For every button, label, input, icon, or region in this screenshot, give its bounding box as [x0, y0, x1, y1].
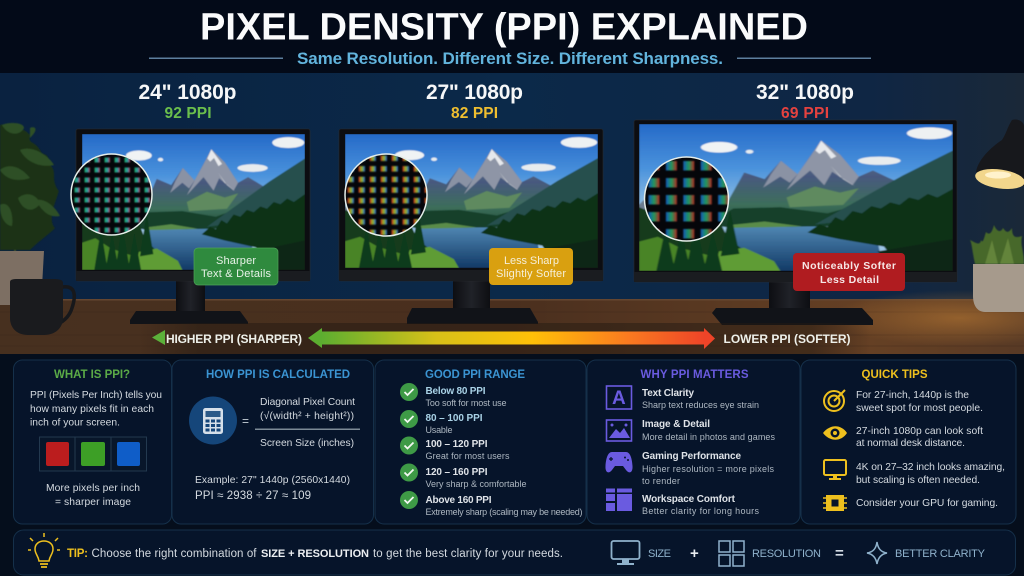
- range: above 160: Extremely sharp (scaling may be needed): [426, 507, 582, 517]
- item: image and detail: [606, 419, 776, 442]
- coffee mug: [10, 279, 74, 335]
- monitor 1: [70, 129, 310, 324]
- range: 80 to 100: [400, 410, 483, 435]
- title: PIXEL DENSITY (PPI) EXPLAINED: [200, 6, 808, 48]
- label: 24 inch monitor: 92 PPI: [164, 105, 212, 122]
- sharpness scale arrow: [140, 323, 870, 354]
- monitor 3: [634, 120, 957, 325]
- description: PPI (Pixels Per Inch) tells you: [30, 390, 162, 401]
- caption: [46, 483, 140, 508]
- description: how many pixels fit in each: [30, 404, 154, 415]
- badge: sharper: [194, 248, 278, 285]
- subtitle: Same Resolution. Different Size. Different Sharpness.: [297, 49, 723, 68]
- equals: =: [835, 545, 844, 562]
- range: above 160: [400, 491, 582, 517]
- panel: why PPI matters: [587, 360, 800, 524]
- stand 1: [130, 280, 248, 324]
- item: text clarity: Sharp text reduces eye strain: [642, 400, 759, 410]
- badge: less sharp: [489, 248, 573, 285]
- equation: resolution: [719, 541, 821, 566]
- desk lamp: [974, 119, 1024, 192]
- item: text clarity: [606, 386, 759, 410]
- heading: QUICK TIPS: [862, 369, 928, 381]
- label: 24 inch monitor: [138, 81, 236, 122]
- tip: 4K scaling: 4K on 27–32 inch looks amazing,: [856, 462, 1005, 473]
- heading: WHAT IS PPI?: [54, 369, 130, 381]
- badge: less sharp: Less Sharp: [504, 255, 559, 267]
- example: PPI ≈ 2938 ÷ 27 ≈ 109: [195, 490, 311, 502]
- label: 27 inch monitor: 82 PPI: [451, 105, 498, 122]
- tip: 4K scaling: but scaling is often needed.: [856, 475, 980, 486]
- lower label: LOWER PPI (SOFTER): [724, 332, 850, 346]
- formula: [242, 397, 360, 449]
- item: workspace comfort: Workspace Comfort: [642, 494, 736, 505]
- item: workspace comfort: [606, 488, 760, 516]
- label: 27 inch monitor: [426, 81, 523, 122]
- range: below 80: Below 80 PPI: [426, 386, 486, 397]
- item: workspace comfort: Better clarity for long hours: [642, 506, 760, 516]
- range: below 80: [400, 383, 506, 408]
- tip text: [67, 548, 563, 560]
- formula: Screen Size (inches): [260, 438, 354, 449]
- tip: 4K scaling: [824, 460, 1005, 486]
- description: [30, 390, 162, 428]
- monitor 2: [339, 129, 603, 324]
- equation: size: [612, 541, 671, 565]
- panel: what is PPI: [14, 360, 172, 524]
- formula: =: [242, 414, 249, 428]
- desk: [0, 290, 1024, 355]
- icon: light bulb: [28, 533, 60, 567]
- icon: calculator: [189, 396, 237, 444]
- tip text: TIP:: [67, 548, 88, 560]
- screen 3 landscape: [639, 124, 953, 271]
- tip: desk distance: 27-inch 1080p can look soft: [856, 426, 983, 437]
- item: gaming performance: Gaming Performance: [642, 451, 741, 462]
- badge: sharper: Sharper: [216, 255, 256, 267]
- gradient bar: [308, 328, 715, 349]
- badge: noticeably softer: [793, 253, 905, 291]
- heading: HOW PPI IS CALCULATED: [206, 369, 350, 381]
- panel: quick tips: [801, 360, 1016, 524]
- item: gaming performance: Higher resolution = more pixels: [642, 464, 774, 474]
- tip: sweet spot: sweet spot for most people.: [856, 403, 983, 414]
- tip text: Choose the right combination of: [92, 548, 257, 560]
- item: text clarity: A: [612, 388, 626, 409]
- bezel 3: [634, 120, 957, 282]
- magnifier 3 pixel grid: [644, 157, 729, 242]
- badge: noticeably softer: Noticeably Softer: [802, 260, 896, 272]
- panel: how PPI is calculated: [172, 360, 374, 524]
- range: above 160: Above 160 PPI: [426, 495, 492, 506]
- label: 32 inch monitor: 69 PPI: [781, 105, 829, 122]
- label: 24 inch monitor: 24" 1080p: [138, 81, 236, 104]
- wall: [0, 73, 1024, 301]
- tip text: SIZE + RESOLUTION: [261, 548, 369, 560]
- example: Example: 27" 1440p (2560x1440): [195, 475, 350, 486]
- label: 32 inch monitor: [756, 81, 854, 122]
- badge: noticeably softer: Less Detail: [820, 274, 879, 286]
- header band: [0, 0, 1024, 73]
- bezel 2: [339, 129, 603, 281]
- description: inch of your screen.: [30, 418, 120, 428]
- item: image and detail: More detail in photos and games: [642, 432, 776, 442]
- caption: = sharper image: [55, 497, 131, 508]
- item: gaming performance: [605, 451, 774, 486]
- RGB subpixels: [40, 437, 146, 471]
- equation: better clarity: BETTER CLARITY: [895, 548, 986, 560]
- magnifier 1 pixel grid: [70, 153, 153, 236]
- range: 80 to 100: 80 – 100 PPI: [426, 413, 483, 424]
- tip: sweet spot: For 27-inch, 1440p is the: [856, 390, 969, 401]
- tip: desk distance: [823, 426, 983, 449]
- label: 32 inch monitor: 32" 1080p: [756, 81, 854, 104]
- tip: desk distance: at normal desk distance.: [856, 438, 965, 449]
- heading: GOOD PPI RANGE: [425, 369, 525, 381]
- range: 100 to 120: 100 – 120 PPI: [426, 439, 488, 450]
- magnifier 2 pixel grid: [344, 153, 428, 237]
- equation: size: SIZE: [648, 548, 671, 560]
- pot left: [0, 251, 44, 305]
- screen 1 landscape: [82, 134, 305, 270]
- plus: +: [690, 545, 699, 562]
- caption: More pixels per inch: [46, 483, 140, 494]
- example: [195, 475, 350, 502]
- equation: resolution: RESOLUTION: [752, 548, 821, 560]
- badge: less sharp: Slightly Softer: [496, 268, 566, 280]
- pot right: [973, 264, 1024, 312]
- stand 3: [712, 282, 873, 325]
- range: 120 to 160: Very sharp & comfortable: [426, 479, 526, 489]
- formula: (√(width² + height²)): [260, 410, 354, 422]
- tip text: to get the best clarity for your needs.: [373, 548, 563, 560]
- heading: WHY PPI MATTERS: [640, 369, 749, 381]
- formula: Diagonal Pixel Count: [260, 397, 355, 408]
- panel band: [0, 354, 1024, 576]
- range: 120 to 160: [400, 464, 526, 489]
- plant right: [970, 225, 1024, 264]
- label: 27 inch monitor: 27" 1080p: [426, 81, 523, 104]
- range: 100 to 120: Great for most users: [426, 451, 510, 461]
- item: gaming performance: to render: [642, 476, 680, 486]
- tip: GPU: [823, 495, 998, 511]
- higher label: HIGHER PPI (SHARPER): [166, 332, 302, 346]
- range: 120 to 160: 120 – 160 PPI: [426, 467, 488, 478]
- badge: sharper: Text & Details: [201, 268, 272, 280]
- item: image and detail: Image & Detail: [642, 419, 710, 430]
- range: 80 to 100: Usable: [426, 425, 452, 435]
- panel: good PPI range: [375, 360, 586, 524]
- range: below 80: Too soft for most use: [426, 398, 506, 408]
- equation: better clarity: [867, 542, 986, 564]
- stand 2: [407, 280, 538, 324]
- screen 2 landscape: [345, 134, 598, 268]
- tip bar: [14, 530, 1016, 575]
- tip: sweet spot: [824, 390, 983, 414]
- plant left: [0, 123, 60, 255]
- item: text clarity: Text Clarity: [642, 388, 694, 399]
- range: 100 to 120: [400, 436, 510, 461]
- tip: GPU: Consider your GPU for gaming.: [856, 498, 998, 509]
- bezel 1: [76, 129, 310, 281]
